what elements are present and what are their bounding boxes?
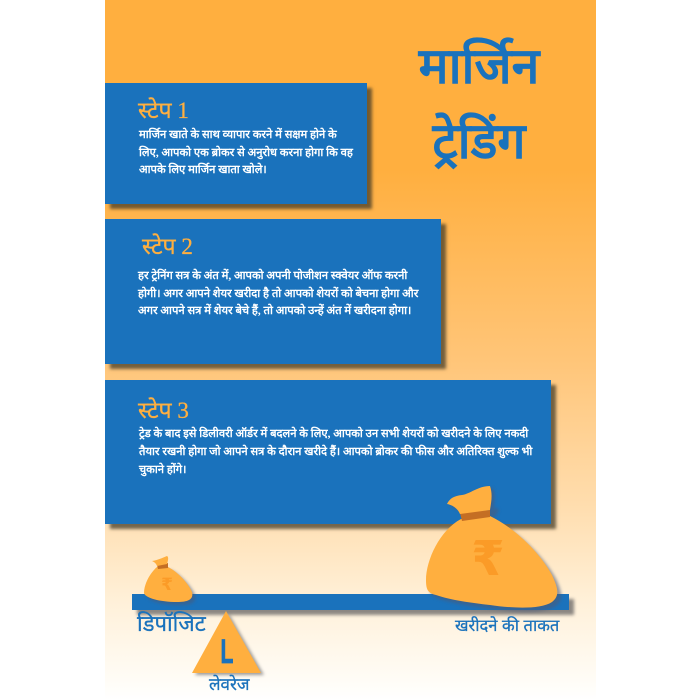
panel: step 2: होगी। अगर आपने शेयर खरीदा है तो आपको शेयरों को बेचना होगा और bbox=[138, 288, 418, 300]
panel: step 1: मार्जिन खाते के साथ व्यापार करने में सक्षम होने के bbox=[139, 129, 337, 141]
panel: step 1 bbox=[105, 83, 367, 204]
icon: large money bag: ₹ bbox=[471, 531, 505, 587]
label: deposit: डिपॉजिट bbox=[137, 611, 206, 636]
panel: step 3: चुकाने होंगे। bbox=[139, 464, 186, 476]
panel: step 2: स्टेप 2 bbox=[142, 234, 193, 259]
title: ट्रेडिंग bbox=[432, 113, 526, 169]
label: buying power: खरीदने की ताकत bbox=[455, 617, 559, 635]
title bbox=[418, 37, 541, 170]
panel: step 1: लिए, आपको एक ब्रोकर से अनुरोध करना होगा कि वह bbox=[139, 146, 353, 158]
panel: step 2: हर ट्रेनिंग सत्र के अंत में, आपको अपनी पोजीशन स्क्वेयर ऑफ करनी bbox=[138, 270, 407, 282]
panel: step 3: ट्रेड के बाद इसे डिलीवरी ऑर्डर में बदलने के लिए, आपको उन सभी शेयरों को खरीदने के लिए नकदी bbox=[139, 428, 528, 440]
icon: large money bag bbox=[426, 486, 561, 612]
label: leverage: लेवरेज bbox=[209, 675, 250, 694]
panel: step 1: आपके लिए मार्जिन खाता खोले। bbox=[139, 164, 267, 176]
icon: small money bag bbox=[144, 556, 195, 605]
title: मार्जिन bbox=[419, 38, 539, 94]
icon: fulcrum triangle bbox=[192, 611, 264, 675]
icon: small money bag: ₹ bbox=[161, 575, 173, 595]
icon: fulcrum triangle: L bbox=[220, 632, 233, 670]
panel: step 2: अगर आपने सत्र में शेयर बेचे हैं, तो आपको उन्हें अंत में खरीदना होगा। bbox=[138, 305, 411, 317]
beam bbox=[132, 594, 574, 615]
panel: step 3 bbox=[105, 380, 551, 524]
panel: step 2 bbox=[105, 219, 441, 364]
panel: step 1: स्टेप 1 bbox=[138, 98, 189, 123]
panel: step 3: स्टेप 3 bbox=[138, 398, 189, 423]
poster background bbox=[105, 0, 596, 700]
panel: step 3: तैयार रखनी होगा जो आपने सत्र के दौरान खरीदे हैं। आपको ब्रोकर की फीस और अतिरिक्त शुल्क भी bbox=[139, 446, 532, 458]
